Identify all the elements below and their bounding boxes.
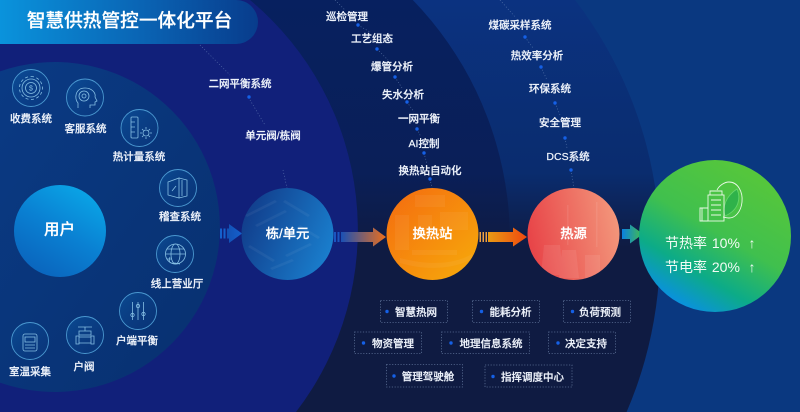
tag: GIS: 地理信息系统: [460, 337, 523, 350]
tag: GIS: [442, 332, 530, 354]
node: savings result: [639, 160, 791, 312]
icon: billing gear: [12, 70, 50, 106]
label: coal sampling: 煤碳采样系统: [488, 18, 552, 32]
arrow: station to source: [480, 228, 527, 246]
tag: smart heat network: [380, 300, 448, 322]
label: environmental system: 环保系统: [529, 82, 571, 95]
label: end balance: 户端平衡: [116, 334, 158, 347]
panel: user zone: [0, 62, 220, 392]
label: burst analysis: 爆管分析: [371, 60, 413, 73]
tag: energy analysis: 能耗分析: [490, 306, 532, 318]
panel: heat station zone: [0, 0, 510, 412]
label: online hall: 线上营业厅: [151, 277, 203, 290]
node: user: [14, 185, 106, 277]
tag: materials management: [354, 332, 422, 354]
label: room temperature: 室温采集: [9, 365, 51, 378]
label: secondary balance: 二网平衡系统: [208, 77, 272, 90]
label: process configuration: 工艺组态: [351, 32, 393, 45]
label: AI control: AI控制: [409, 137, 439, 150]
connector nodes: [247, 23, 573, 181]
label: thermal efficiency: 热效率分析: [511, 49, 564, 62]
label: household valve: 户阀: [74, 360, 94, 373]
icon: globe with hand: [156, 236, 194, 272]
stat: power saving: 节电率 20%: [665, 259, 740, 275]
label: customer service: 客服系统: [64, 122, 107, 135]
label: unit valve: 单元阀/栋阀: [245, 129, 301, 142]
dotted connectors: [200, 0, 574, 188]
node: heat source: 热源: [560, 225, 587, 241]
stat: heat saving: ↑: [748, 235, 756, 251]
icon: customer service head: [66, 79, 104, 116]
tag: load forecast: 负荷预测: [579, 306, 621, 318]
label: billing: 收费系统: [10, 112, 52, 125]
tag: decision support: [548, 332, 616, 354]
title banner: 智慧供热管控一体化平台: [27, 10, 232, 31]
arrow: source to result: [622, 224, 643, 244]
label: inspection management: 巡检管理: [326, 10, 368, 23]
tag: command center: [485, 365, 572, 387]
icon: inspection box: [160, 170, 196, 206]
label: primary balance: 一网平衡: [398, 113, 440, 125]
node: user: 用户: [44, 220, 75, 238]
label: water loss analysis: 失水分析: [382, 88, 424, 101]
tag: management cockpit: 管理驾驶舱: [402, 370, 455, 383]
label: DCS system: DCS系统: [546, 150, 590, 163]
icon: billing gear: $: [29, 86, 33, 92]
node: heat source: [528, 188, 620, 280]
node: building unit: 栋/单元: [266, 225, 309, 241]
tag: load forecast: [564, 300, 630, 322]
panel: building unit zone: [0, 0, 358, 412]
arrow: unit to station: [334, 228, 386, 246]
label: inspection: 稽查系统: [159, 210, 201, 223]
title banner: [0, 0, 258, 44]
node: building unit: [242, 188, 334, 280]
label: station automation: 换热站自动化: [398, 164, 462, 177]
node: heat station: 换热站: [413, 225, 452, 241]
icon: green building with leaf: [700, 182, 742, 221]
arrow: user to unit: [220, 224, 242, 243]
label: safety management: 安全管理: [539, 116, 581, 129]
tag: decision support: 决定支持: [565, 337, 607, 350]
stat: heat saving: 节热率 10%: [665, 235, 740, 251]
node: heat station: [386, 188, 478, 280]
tag: smart heat network: 智慧热网: [395, 306, 437, 318]
tag: materials management: 物资管理: [372, 337, 414, 350]
label: heat metering: 热计量系统: [113, 150, 166, 163]
icon: valve: [66, 316, 104, 354]
tag: energy analysis: [472, 300, 540, 322]
tag: management cockpit: [386, 364, 462, 387]
icon: room temperature meter: [12, 322, 48, 360]
icon: heat meter: [121, 110, 158, 146]
icon: balance sliders: [120, 292, 156, 330]
tag: command center: 指挥调度中心: [501, 370, 564, 384]
stat: power saving: ↑: [748, 259, 756, 275]
